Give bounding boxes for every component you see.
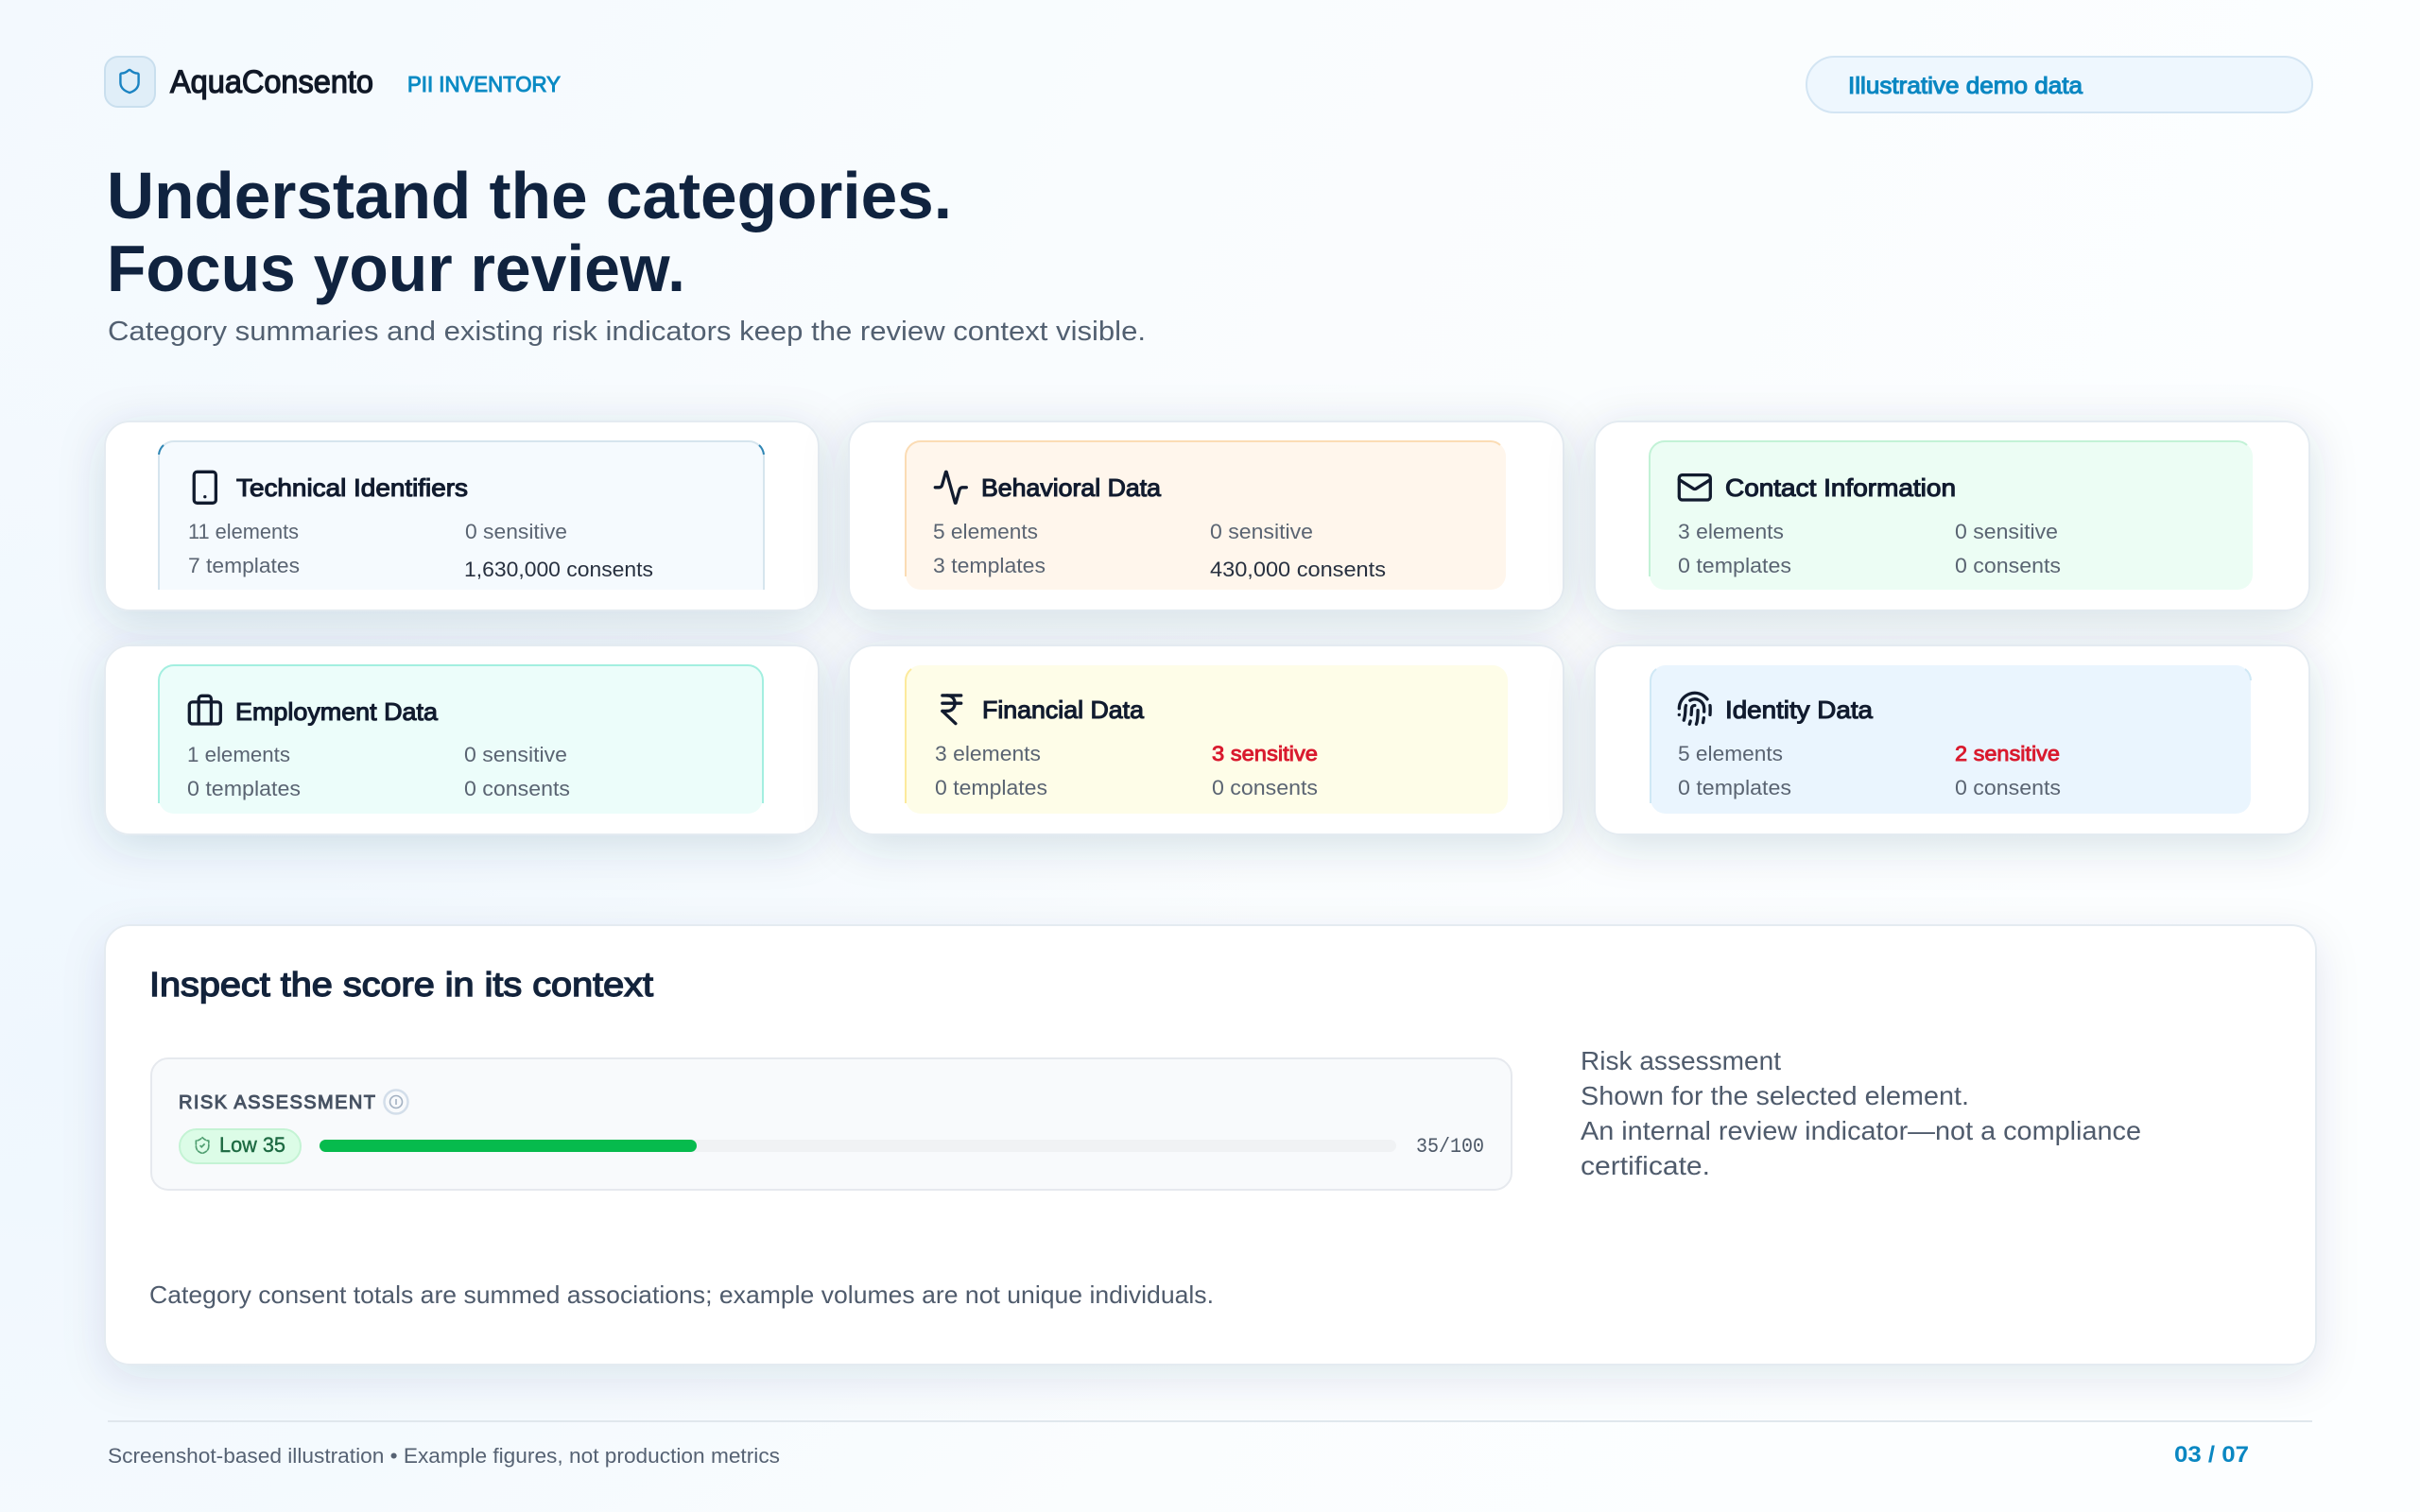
stats: 0 consents (1955, 554, 2061, 577)
demo data pill (1806, 57, 2312, 112)
risk badge: Low 35 (219, 1133, 285, 1157)
risk badge (180, 1129, 301, 1163)
stats: 0 templates (187, 777, 301, 800)
stats: 0 templates (1678, 776, 1791, 799)
panel: technical identifiers (105, 421, 819, 610)
icon: shield logo (105, 57, 155, 107)
card title: Financial Data (982, 696, 1145, 724)
stats (933, 520, 1386, 581)
stats (935, 742, 1318, 799)
subtitle: Category summaries and existing risk indicators keep the review context visible. (108, 317, 1146, 347)
stats: 0 sensitive (464, 743, 567, 766)
brand name: AquaConsento (170, 64, 373, 100)
panel: identity data (1595, 645, 2309, 834)
icon: smartphone (194, 472, 216, 503)
score value: 35/100 (1416, 1135, 1484, 1159)
footer (108, 1421, 2312, 1468)
title: Focus your review. (107, 232, 685, 305)
stats: 0 consents (1955, 776, 2061, 799)
title (107, 159, 952, 305)
widget label: RISK ASSESSMENT (179, 1092, 375, 1113)
card title: Employment Data (235, 697, 439, 726)
stats: 0 sensitive (1955, 520, 2058, 543)
stats: 0 templates (935, 776, 1047, 799)
panel: employment data (105, 645, 819, 834)
explanation text: Risk assessment (1581, 1046, 1781, 1075)
card title: Behavioral Data (981, 473, 1162, 502)
stats: 0 consents (464, 777, 570, 800)
section tag: PII INVENTORY (407, 72, 561, 96)
card title: Identity Data (1725, 696, 1874, 724)
icon: fingerprint (1679, 693, 1710, 724)
stats: 430,000 consents (1210, 558, 1386, 581)
stats: 3 templates (933, 554, 1046, 577)
stats: 3 elements (1678, 520, 1784, 543)
stats: 3 elements (935, 742, 1041, 765)
explanation text: certificate. (1581, 1151, 1710, 1180)
page number: 03 / 07 (2174, 1442, 2249, 1468)
risk assessment widget (151, 1058, 1512, 1190)
footnote: Category consent totals are summed associations; example volumes are not unique individuals. (149, 1280, 1214, 1309)
panel: score context (105, 925, 2316, 1365)
stats: 11 elements (188, 520, 299, 543)
stats: 1 elements (187, 743, 290, 766)
icon: activity pulse (935, 472, 966, 503)
icon: mail (1679, 475, 1710, 500)
panel heading: Inspect the score in its context (149, 965, 653, 1004)
demo data pill: Illustrative demo data (1848, 73, 2083, 99)
icon: rupee (942, 696, 961, 724)
stats: 7 templates (188, 554, 300, 577)
score bar (320, 1140, 1396, 1152)
icon: info (384, 1091, 408, 1113)
stats: 3 sensitive (1212, 742, 1318, 765)
stats: 0 consents (1212, 776, 1318, 799)
stats: 0 sensitive (1210, 520, 1313, 543)
stats: 0 sensitive (465, 520, 567, 543)
card title: Contact Information (1725, 473, 1956, 502)
explanation text (1581, 1046, 2141, 1180)
icon: briefcase (189, 696, 220, 724)
stats (187, 743, 570, 800)
stats (1678, 742, 2061, 799)
stats (188, 520, 653, 581)
panel: contact information (1595, 421, 2309, 610)
explanation text: Shown for the selected element. (1581, 1081, 1969, 1110)
stats: 2 sensitive (1955, 742, 2060, 765)
explanation text: An internal review indicator—not a compliance (1581, 1116, 2141, 1145)
stats (1678, 520, 2061, 577)
panel: financial data (849, 645, 1564, 834)
stats: 5 elements (933, 520, 1038, 543)
header: brand (105, 57, 561, 107)
panel: behavioral data (849, 421, 1564, 610)
card title: Technical Identifiers (236, 473, 468, 502)
stats: 0 templates (1678, 554, 1791, 577)
stats: 1,630,000 consents (464, 558, 653, 581)
stats: 5 elements (1678, 742, 1783, 765)
footer note: Screenshot-based illustration • Example figures, not production metrics (108, 1444, 780, 1468)
title: Understand the categories. (107, 159, 952, 232)
